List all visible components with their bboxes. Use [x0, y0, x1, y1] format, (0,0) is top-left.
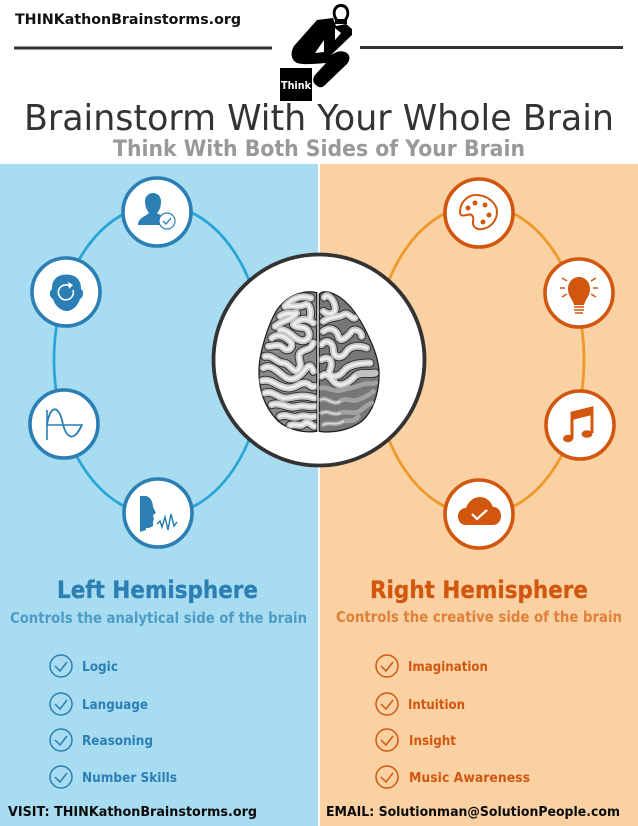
- header rule left: [14, 46, 272, 50]
- list: left skills: [50, 655, 177, 788]
- item: Intuition: [376, 693, 465, 715]
- heading: right hemisphere: Right Hemisphere: [370, 576, 588, 604]
- brain illustration: [259, 292, 379, 432]
- logo: thinker on a Think box: [280, 4, 352, 101]
- icon: cloud with check: [445, 480, 513, 548]
- item: Music Awareness: [376, 766, 530, 788]
- left ring: [54, 205, 264, 515]
- icon: speaking head: [124, 479, 192, 547]
- subtitle: Think With Both Sides of Your Brain: [113, 137, 525, 162]
- item: Reasoning: Reasoning: [82, 733, 153, 749]
- center brain medallion: [214, 254, 424, 466]
- icon: head with refresh: [32, 258, 100, 326]
- footer visit: VISIT: THINKathonBrainstorms.org: [8, 804, 257, 820]
- right ring: [374, 205, 584, 515]
- logo: thinker on a Think box: Think: [281, 80, 312, 92]
- subheading: left: Controls the analytical side of the brain: [10, 609, 307, 627]
- title: Brainstorm With Your Whole Brain: [24, 98, 614, 139]
- item: Logic: Logic: [82, 659, 118, 675]
- icon: light bulb: [545, 259, 613, 327]
- item: Music Awareness: Music Awareness: [409, 770, 530, 786]
- icon: palette: [445, 179, 513, 247]
- item: Imagination: Imagination: [408, 659, 488, 675]
- header rule right: [360, 46, 623, 49]
- heading: left hemisphere: Left Hemisphere: [57, 576, 258, 604]
- item: Language: Language: [82, 697, 148, 713]
- panel: left hemisphere: [0, 164, 318, 826]
- list: right skills: [376, 655, 530, 788]
- footer email: EMAIL: Solutionman@SolutionPeople.com: [326, 804, 620, 820]
- item: Insight: [376, 729, 456, 751]
- item: Insight: Insight: [409, 733, 456, 749]
- item: Intuition: Intuition: [408, 697, 465, 713]
- panel: right hemisphere: [320, 164, 638, 826]
- icon: wave graph: [30, 390, 98, 458]
- icon: music note: [546, 391, 614, 459]
- item: Number Skills: Number Skills: [82, 770, 177, 786]
- icon: person with check: [123, 178, 191, 246]
- item: Imagination: [376, 655, 488, 677]
- header website: THINKathonBrainstorms.org: [15, 12, 241, 28]
